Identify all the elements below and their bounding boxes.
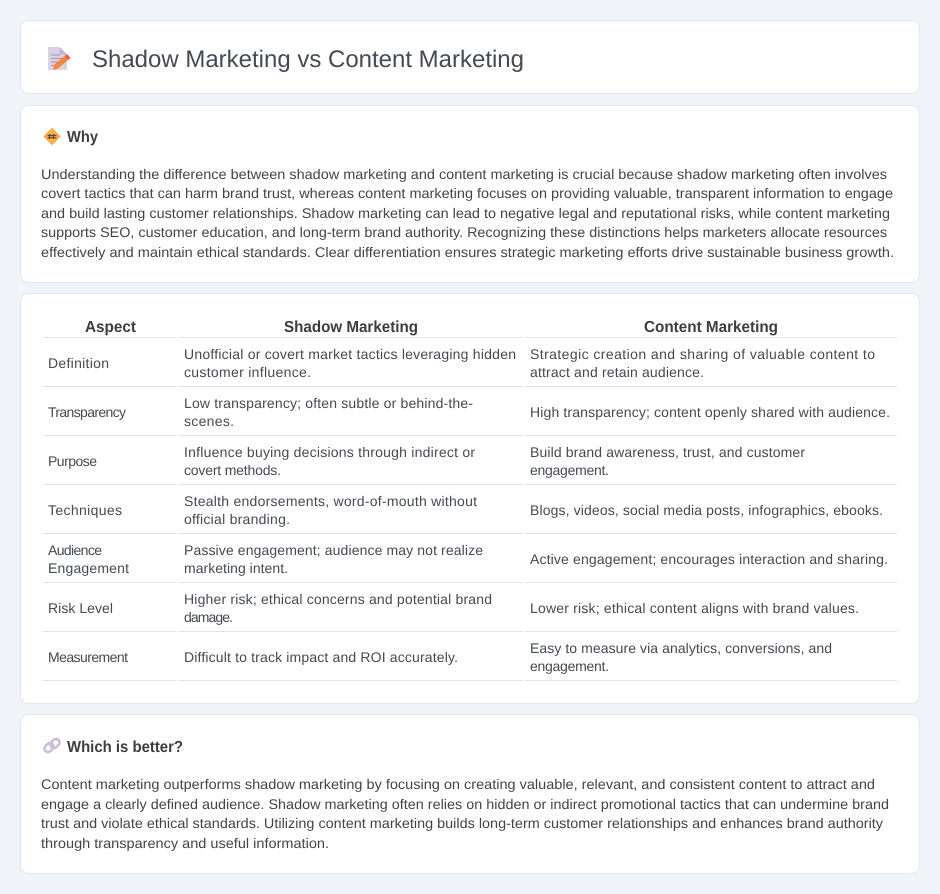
text block: why paragraph bbox=[41, 166, 894, 260]
panel: header bbox=[20, 20, 920, 94]
row: audience engagement: Passive engagement; audience may not realize bbox=[184, 542, 483, 558]
text block: which is better paragraph: through transparency and useful information. bbox=[41, 835, 329, 851]
row: purpose: engagement. bbox=[530, 462, 609, 478]
row: definition bbox=[48, 346, 875, 380]
icon: warning diamond bbox=[44, 128, 60, 144]
row: definition: Definition bbox=[48, 355, 109, 371]
row: measurement: Easy to measure via analytics, conversions, and bbox=[530, 640, 832, 656]
row: transparency bbox=[48, 395, 890, 429]
title: Shadow Marketing vs Content Marketing bbox=[92, 46, 524, 73]
text block: which is better paragraph bbox=[41, 776, 889, 851]
row: purpose: Build brand awareness, trust, and customer bbox=[530, 444, 805, 460]
panel: comparison table bbox=[20, 294, 920, 704]
table header: Shadow Marketing bbox=[284, 319, 418, 336]
row: audience engagement: Audience bbox=[48, 542, 102, 558]
heading: which is better: Which is better? bbox=[67, 739, 183, 756]
text block: which is better paragraph: trust and violate ethical standards. Utilizing content marketing builds long-term customer relationships and enhances brand authority bbox=[41, 815, 883, 831]
text block: which is better paragraph: Content marketing outperforms shadow marketing by focusing on creating valuable, relevant, and consistent content to attract and bbox=[41, 776, 875, 792]
row: risk level: Risk Level bbox=[48, 600, 113, 616]
heading: why: Why bbox=[67, 129, 98, 146]
icon: chain link bbox=[43, 737, 61, 754]
text block: why paragraph: effectively and maintain ethical standards. Clear differentiation ensures strategic marketing efforts drive sustainable business growth. bbox=[41, 244, 894, 260]
row: audience engagement: Engagement bbox=[48, 560, 129, 576]
row: measurement: Difficult to track impact and ROI accurately. bbox=[184, 649, 458, 665]
row: measurement: engagement. bbox=[530, 658, 609, 674]
table header: Content Marketing bbox=[644, 319, 778, 336]
row: techniques: official branding. bbox=[184, 511, 290, 527]
row: risk level bbox=[48, 591, 859, 625]
row: risk level: Higher risk; ethical concerns and potential brand bbox=[184, 591, 492, 607]
icon: document with pencil bbox=[48, 47, 70, 70]
row: risk level: Lower risk; ethical content aligns with brand values. bbox=[530, 600, 859, 616]
panel: why bbox=[20, 106, 920, 282]
panel: which is better bbox=[20, 714, 920, 874]
row: risk level: damage. bbox=[184, 609, 233, 625]
text block: why paragraph: Understanding the difference between shadow marketing and content marketing is crucial because shadow marketing often involves bbox=[41, 166, 887, 182]
row: purpose bbox=[48, 444, 805, 478]
text block: why paragraph: and build lasting customer relationships. Shadow marketing can lead to negative legal and reputational risks, while content marketing bbox=[41, 205, 890, 221]
row: techniques: Stealth endorsements, word-of-mouth without bbox=[184, 493, 477, 509]
table header: Aspect bbox=[85, 319, 137, 336]
row: measurement: Measurement bbox=[48, 649, 128, 665]
row: transparency: scenes. bbox=[184, 413, 234, 429]
row: purpose: Influence buying decisions through indirect or bbox=[184, 444, 475, 460]
text block: why paragraph: covert tactics that can harm brand trust, whereas content marketing focuses on providing valuable, transparent information to engage bbox=[41, 185, 893, 201]
row: techniques: Techniques bbox=[48, 502, 122, 518]
row: purpose: covert methods. bbox=[184, 462, 281, 478]
row: transparency: Low transparency; often subtle or behind-the- bbox=[184, 395, 473, 411]
row: techniques bbox=[48, 493, 883, 527]
row: definition: customer influence. bbox=[184, 364, 311, 380]
table header bbox=[85, 319, 778, 336]
row: transparency: Transparency bbox=[48, 404, 126, 420]
row: audience engagement: Active engagement; encourages interaction and sharing. bbox=[530, 551, 888, 567]
row: purpose: Purpose bbox=[48, 453, 97, 469]
row: definition: Strategic creation and sharing of valuable content to bbox=[530, 346, 875, 362]
row: audience engagement bbox=[48, 542, 888, 576]
row: audience engagement: marketing intent. bbox=[184, 560, 288, 576]
row: definition: Unofficial or covert market tactics leveraging hidden bbox=[184, 346, 516, 362]
row: measurement bbox=[48, 640, 832, 674]
text block: which is better paragraph: engage a clearly defined audience. Shadow marketing often relies on hidden or indirect promotional tactics that can undermine brand bbox=[41, 796, 889, 812]
row: definition: attract and retain audience. bbox=[530, 364, 704, 380]
text block: why paragraph: supports SEO, customer education, and long-term brand authority. Recognizing these distinctions helps marketers allocate resources bbox=[41, 224, 887, 240]
row: techniques: Blogs, videos, social media posts, infographics, ebooks. bbox=[530, 502, 883, 518]
row: transparency: High transparency; content openly shared with audience. bbox=[530, 404, 890, 420]
